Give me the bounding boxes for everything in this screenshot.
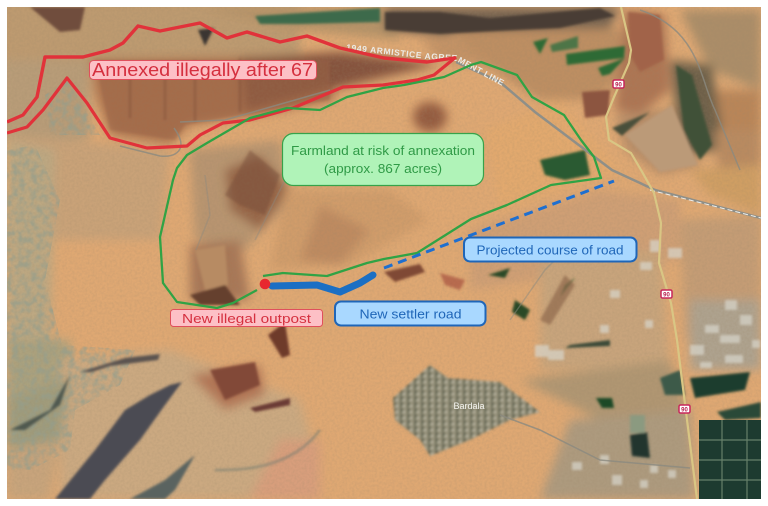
projected road dashed line: [384, 181, 614, 268]
label: farmland at risk: [282, 134, 484, 186]
route badge 90 middle: 90: [663, 292, 670, 298]
new settler road: [272, 275, 373, 292]
red annexation boundary, lower: [7, 57, 456, 148]
dark green irrigated plots: [699, 420, 761, 499]
route badge 90 south: 90: [681, 408, 688, 414]
route badge 90 north: 90: [615, 82, 622, 88]
label: new illegal outpost: [170, 310, 322, 326]
label: annexed illegally: Annexed illegally after 67: [92, 60, 313, 80]
outpost marker: [260, 279, 270, 289]
greenhouse clusters: [535, 240, 760, 488]
red annexation boundary, upper: [7, 23, 454, 122]
label: new settler road: [335, 302, 486, 326]
label: new illegal outpost: New illegal outpost: [182, 311, 311, 326]
armistice line label: 1949 ARMISTICE AGREEMENT LINE: [347, 44, 504, 86]
route badge 90 south: [679, 405, 690, 414]
label: projected course of road: Projected course of road: [476, 242, 624, 258]
highway 90: [606, 7, 697, 499]
town of Bardala: [393, 365, 540, 456]
town label: Bardala: Bardala: [453, 401, 485, 411]
label: projected course of road: [464, 238, 636, 262]
local roads: [120, 10, 740, 468]
label: farmland at risk: Farmland at risk of annexation: [291, 143, 475, 158]
green farmland boundary: [160, 62, 601, 308]
route badge 90 middle: [661, 290, 672, 298]
label: farmland at risk: (approx. 867 acres): [324, 161, 442, 176]
route badge 90 north: [613, 80, 624, 88]
label: new settler road: New settler road: [360, 306, 462, 322]
armistice line road: [456, 62, 761, 218]
scrub vegetation texture: [7, 70, 137, 470]
